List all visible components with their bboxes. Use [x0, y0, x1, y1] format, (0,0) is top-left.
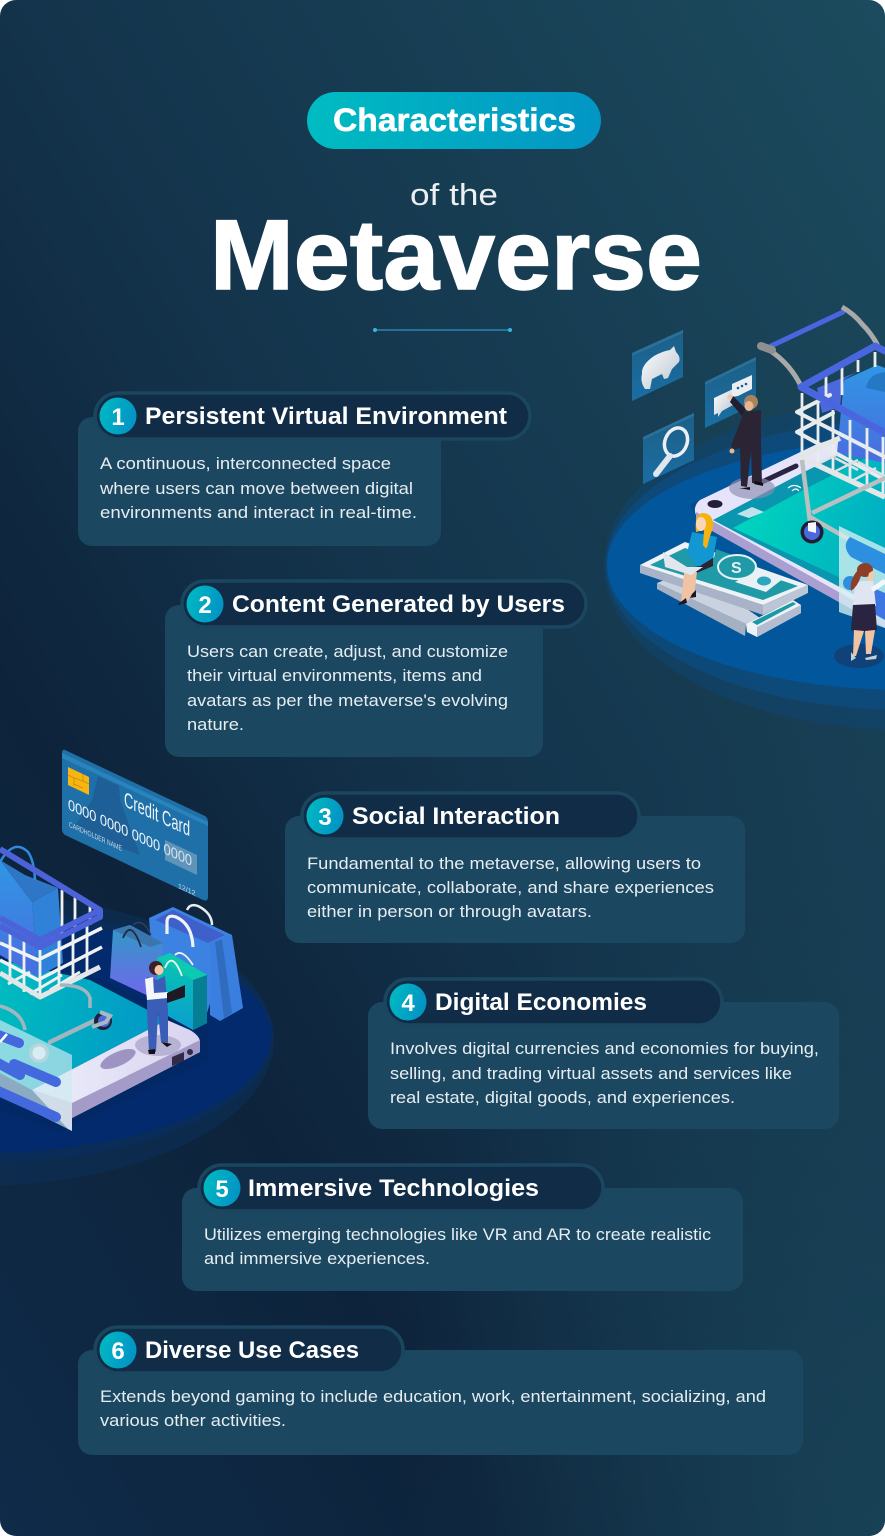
bag: large blue [149, 905, 243, 1021]
panel: 5 Immersive Technologies: 5 [215, 1176, 229, 1203]
title pill: Characteristics [307, 92, 601, 149]
panel: 6 Diverse Use Cases: Diverse Use Cases [145, 1337, 359, 1364]
person: man in suit [728, 394, 763, 490]
panel: 2 Content Generated by Users: 2 [198, 592, 212, 619]
phone body [690, 420, 885, 628]
money stacks [640, 542, 808, 637]
glass panel: left [0, 1020, 72, 1131]
illustration: right shopping scene on disc [604, 307, 885, 730]
panel: 1 Persistent Virtual Environment: 1 [111, 404, 125, 431]
panel: 2 Content Generated by Users [165, 581, 586, 757]
panel: 1 Persistent Virtual Environment: environments and interact in real-time. [100, 503, 417, 522]
money stacks: S [731, 560, 742, 577]
icon tile: piggy bank [632, 330, 683, 401]
panel: 5 Immersive Technologies: and immersive experiences. [204, 1249, 430, 1268]
panel: 6 Diverse Use Cases: various other activities. [100, 1411, 286, 1430]
panel: 5 Immersive Technologies: Utilizes emerging technologies like VR and AR to create realistic [204, 1225, 712, 1244]
panel: 4 Digital Economies: Digital Economies [435, 989, 647, 1016]
cart back bag [817, 372, 857, 413]
glass panel [839, 526, 885, 628]
panel: 3 Social Interaction: 3 [318, 804, 332, 831]
panel: 2 Content Generated by Users: Users can create, adjust, and customize [187, 642, 508, 661]
panel: 4 Digital Economies: real estate, digital goods, and experiences. [390, 1088, 735, 1107]
bag: teal [157, 953, 207, 1030]
illustration: left shopping scene on disc [0, 750, 274, 1186]
heading: Metaverse: Metaverse [210, 199, 702, 310]
icon tile: chat bubbles [705, 357, 756, 428]
panel: 4 Digital Economies: selling, and trading virtual assets and services like [390, 1064, 792, 1083]
person: woman with ponytail [834, 563, 885, 668]
panel: 3 Social Interaction: either in person or through avatars. [307, 902, 592, 921]
card text: CARDHOLDER NAME [69, 820, 122, 853]
panel: 1 Persistent Virtual Environment: A continuous, interconnected space [100, 454, 391, 473]
panel: 3 Social Interaction [285, 793, 745, 943]
panel: 2 Content Generated by Users: nature. [187, 715, 244, 734]
icon tile: magnifier [643, 413, 694, 484]
panel: 3 Social Interaction: Social Interaction [352, 803, 560, 830]
panel: 6 Diverse Use Cases: 6 [111, 1338, 125, 1365]
person: woman with laptop [663, 513, 717, 605]
panel: 1 Persistent Virtual Environment: Persistent Virtual Environment [145, 403, 507, 430]
panel: 1 Persistent Virtual Environment [78, 393, 530, 546]
panel: 6 Diverse Use Cases: Extends beyond gaming to include education, work, entertainment, socializing, and [100, 1387, 766, 1406]
card chip [68, 767, 89, 795]
card text: Credit Card [124, 787, 190, 841]
cart: left [0, 847, 112, 1063]
panel: 5 Immersive Technologies: Immersive Technologies [248, 1175, 539, 1202]
card text: 0000 0000 0000 0000 [68, 797, 192, 870]
panel: 3 Social Interaction: Fundamental to the metaverse, allowing users to [307, 854, 701, 873]
disc: right platform [604, 400, 885, 730]
panel: 1 Persistent Virtual Environment: where users can move between digital [99, 479, 413, 498]
title [210, 92, 702, 310]
person: worker with tablet [136, 961, 185, 1056]
panel: 2 Content Generated by Users: Content Generated by Users [232, 591, 565, 618]
disc: left platform [0, 894, 274, 1186]
title pill: Characteristics: Characteristics [333, 102, 576, 138]
bag: purple gradient [110, 923, 163, 1000]
credit card [62, 750, 208, 901]
panel: 4 Digital Economies [368, 979, 839, 1129]
panel: 2 Content Generated by Users: avatars as per the metaverse's evolving [187, 691, 508, 710]
panel: 4 Digital Economies: Involves digital currencies and economies for buying, [390, 1039, 819, 1058]
panel: 3 Social Interaction: communicate, collaborate, and share experiences [307, 878, 714, 897]
cart main bag [837, 365, 885, 463]
panel: 4 Digital Economies: 4 [401, 990, 415, 1017]
phone body: left [0, 940, 208, 1132]
card text [68, 761, 196, 898]
panel: 2 Content Generated by Users: their virtual environments, items and [187, 666, 482, 685]
cart: right [761, 307, 885, 560]
card text: 12/12 [178, 881, 196, 898]
panel: 6 Diverse Use Cases [78, 1327, 803, 1455]
panel: 5 Immersive Technologies [182, 1165, 743, 1291]
subtitle: of the: of the [410, 177, 498, 212]
